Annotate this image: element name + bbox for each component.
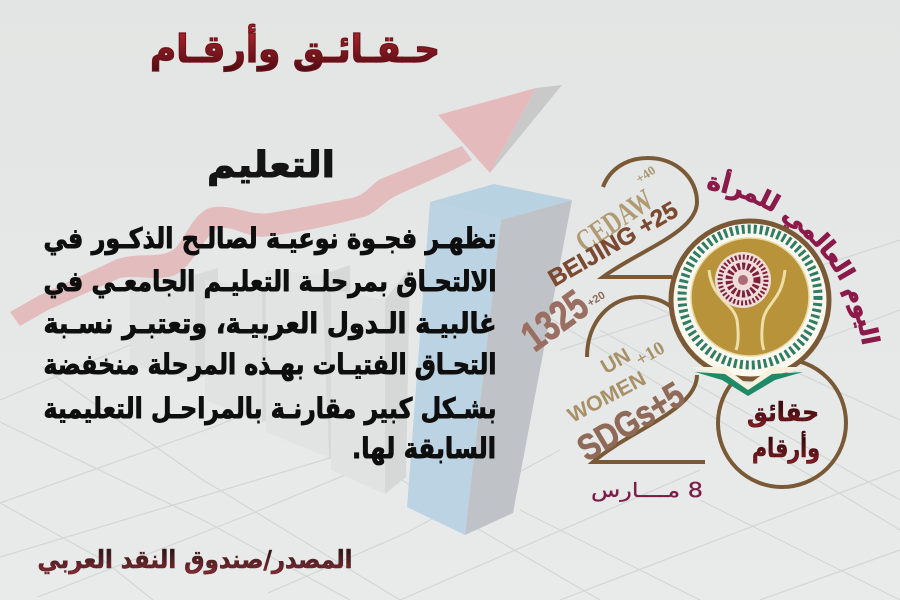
label: BEIJING +25: BEIJING +25 (544, 197, 683, 292)
logo: 2020 (512, 158, 846, 502)
body text: الالتحـاق بمرحلـة التعليـم الجامعـي في (44, 265, 496, 298)
curved title: International Women's Day: اليوم العالمي للمرأة (707, 168, 881, 344)
heading: education: التعليم (207, 145, 335, 186)
emblem (671, 221, 829, 396)
outer ring (671, 221, 829, 379)
label: +40: +40 (633, 162, 658, 186)
chart: faded bars (130, 184, 572, 535)
label: WOMEN: WOMEN (564, 367, 650, 427)
blue bar (407, 184, 572, 535)
label: +10: +10 (632, 338, 668, 371)
label: CEDAW: CEDAW (569, 182, 660, 259)
body text: غالبيـة الـدول العربيـة، وتعتبـر نسـبة (44, 307, 496, 340)
floor grid (0, 240, 900, 600)
body text: بشـكل كبير مقارنـة بالمراحـل التعليمية (44, 392, 496, 425)
facts and figures caption (747, 398, 820, 464)
green book (690, 367, 808, 396)
label: 1325: 1325 (512, 281, 597, 360)
open hands (709, 270, 785, 350)
label: +20: +20 (585, 289, 608, 309)
body text: التحـاق الفتيـات بهـذه المرحلة منخفضة (44, 348, 496, 381)
date: 8 March: 8 مــــارس (591, 478, 703, 502)
body text: السابقة لها. (352, 432, 496, 465)
trend arrow (10, 85, 562, 326)
wreath (682, 229, 818, 365)
gold disc (691, 238, 809, 356)
title: حـقـائـق وأرقـام (150, 24, 440, 72)
label: UN: UN (597, 344, 634, 379)
label: SDGs+5: SDGs+5 (570, 374, 691, 469)
source: المصدر/صندوق النقد العربي (38, 545, 352, 575)
calligraphy roundel (715, 252, 771, 308)
small circle (718, 359, 846, 487)
facts and figures caption: حقائق (747, 398, 819, 428)
body text: تظهـر فجـوة نوعيـة لصالـح الذكـور في (44, 222, 496, 255)
body text (44, 222, 496, 465)
numeral strokes (587, 158, 705, 462)
facts and figures caption: وأرقام (752, 431, 820, 464)
